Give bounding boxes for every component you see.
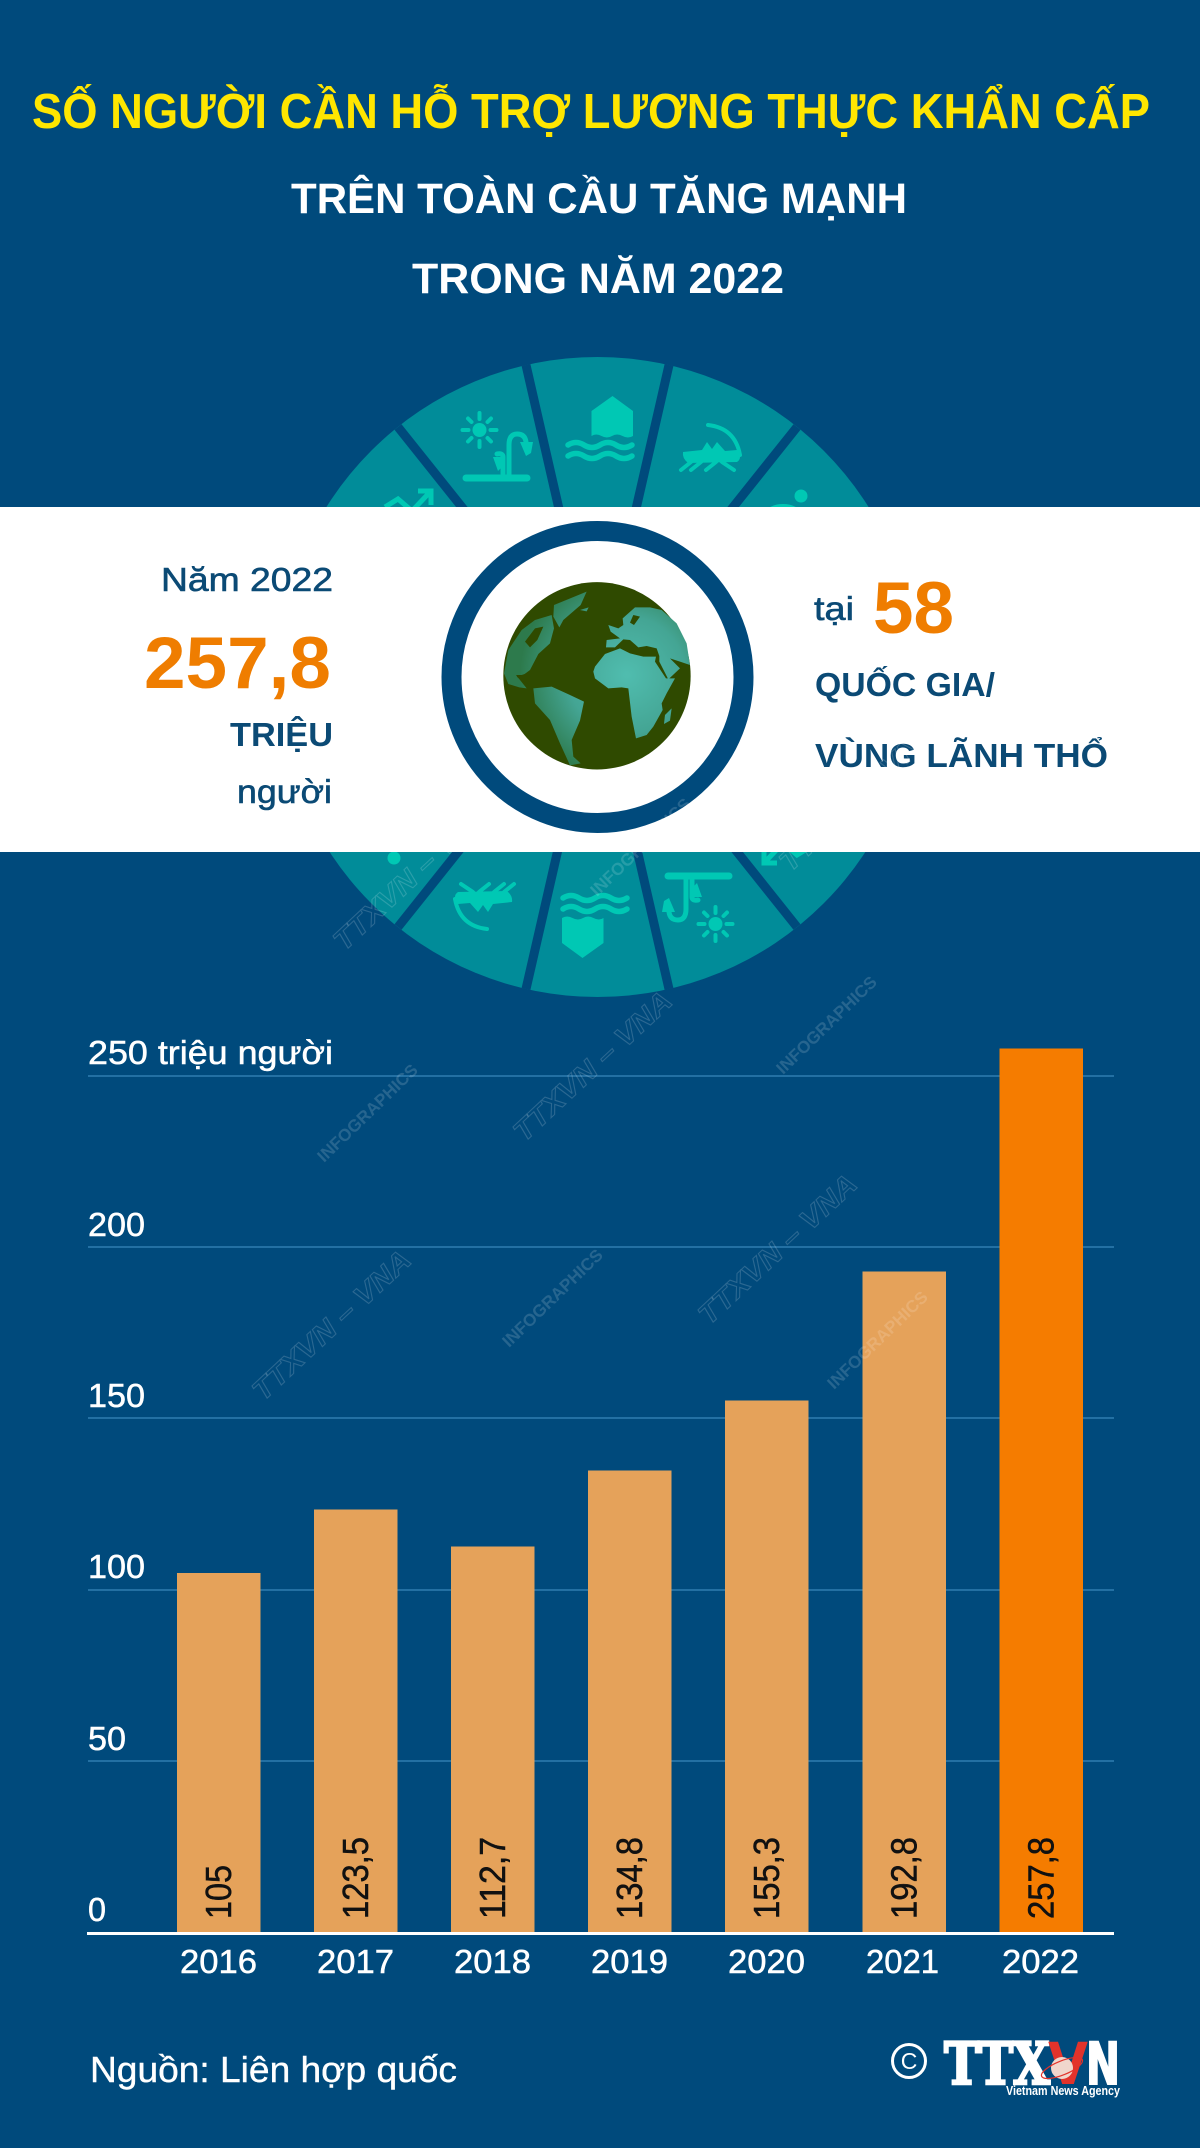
copyright mark: C (901, 2048, 917, 2074)
wheel disc (278, 357, 918, 997)
year labels: 2020 (728, 1944, 805, 1981)
globe (503, 582, 691, 769)
watermarks: INFOGRAPHICS (773, 973, 881, 1078)
y axis labels: 100 (88, 1549, 145, 1586)
value labels: 134,8 (609, 1837, 650, 1919)
left stat block (144, 561, 333, 810)
title line 2: TRÊN TOÀN CẦU TĂNG MẠNH (291, 174, 907, 223)
icon: house and flood, rotated (562, 896, 627, 958)
y axis labels: 250 triệu người (88, 1035, 333, 1072)
watermarks: TTXVN – VNA (692, 1168, 863, 1330)
y axis labels (88, 1035, 333, 1929)
wordmark: V (1048, 2030, 1088, 2098)
value labels: 105 (198, 1865, 239, 1919)
big number: 58 (873, 568, 954, 649)
x axis line (87, 1932, 1114, 1935)
watermarks: INFOGRAPHICS (314, 1061, 422, 1166)
y axis labels: 50 (88, 1721, 126, 1758)
watermarks: TTXVN – VNA (246, 1244, 417, 1406)
value labels: 155,3 (746, 1837, 787, 1919)
watermarks (246, 715, 944, 1406)
year labels (180, 1944, 1079, 1981)
bars (177, 1048, 1083, 1933)
icon: grasshopper (681, 425, 740, 470)
right stat block (814, 568, 1108, 774)
value labels: 112,7 (472, 1837, 513, 1919)
title (32, 84, 1150, 303)
wordmark: TTX (944, 2030, 1050, 2098)
icon: sun and plant (462, 413, 533, 478)
segmented wheel of hazards (278, 357, 918, 997)
logo (892, 2030, 1120, 2098)
icon: rising arrow (385, 491, 431, 511)
icon: grasshopper, rotated (455, 884, 514, 929)
wordmark: N (1086, 2030, 1120, 2098)
year labels: 2018 (454, 1944, 531, 1981)
territories label: VÙNG LÃNH THỔ (815, 737, 1108, 774)
year labels: 2017 (317, 1944, 394, 1981)
year labels: 2021 (866, 1944, 939, 1981)
wheel separators (398, 365, 797, 989)
white band (0, 507, 1200, 852)
icon: figure (766, 490, 808, 522)
logo globe (1039, 2053, 1085, 2083)
title line 3: TRONG NĂM 2022 (412, 255, 784, 303)
value labels: 123,5 (335, 1837, 376, 1919)
y axis labels: 200 (88, 1207, 145, 1244)
icon: sun and plant, rotated (662, 876, 732, 941)
watermarks: TTXVN – VNA (327, 794, 498, 956)
agency name: Vietnam News Agency (1006, 2084, 1120, 2098)
icon: house and flood (568, 396, 633, 458)
y axis labels: 0 (88, 1892, 106, 1929)
watermarks: TTXVN – VNA (507, 985, 678, 1147)
countries label: QUỐC GIA/ (815, 665, 995, 703)
icon: arrow, rotated (764, 843, 810, 863)
watermarks: TTXVN – VNA (773, 715, 944, 877)
source note: Nguồn: Liên hợp quốc (90, 2049, 457, 2090)
label: at: tại (814, 590, 854, 627)
icon: figure, rotated (388, 832, 429, 864)
ring (452, 531, 744, 823)
year labels: 2019 (591, 1944, 668, 1981)
y axis labels: 150 (88, 1378, 145, 1415)
value labels: 192,8 (884, 1837, 924, 1919)
year labels: 2016 (180, 1944, 257, 1981)
year labels: 2022 (1002, 1944, 1079, 1981)
watermarks: INFOGRAPHICS (499, 1246, 607, 1351)
unit: TRIỆU (230, 716, 333, 753)
watermarks: INFOGRAPHICS (824, 1288, 932, 1393)
copyright mark (892, 2044, 926, 2078)
big number: 257,8 (144, 623, 331, 704)
globe emblem (452, 531, 744, 823)
value labels: 257,8 (1020, 1837, 1062, 1919)
bar chart (87, 1035, 1114, 1981)
label: year: Năm 2022 (161, 561, 333, 598)
value labels (198, 1837, 1062, 1919)
unit noun: người (237, 773, 332, 810)
watermarks: INFOGRAPHICS (587, 795, 695, 900)
grid lines (88, 1076, 1114, 1761)
